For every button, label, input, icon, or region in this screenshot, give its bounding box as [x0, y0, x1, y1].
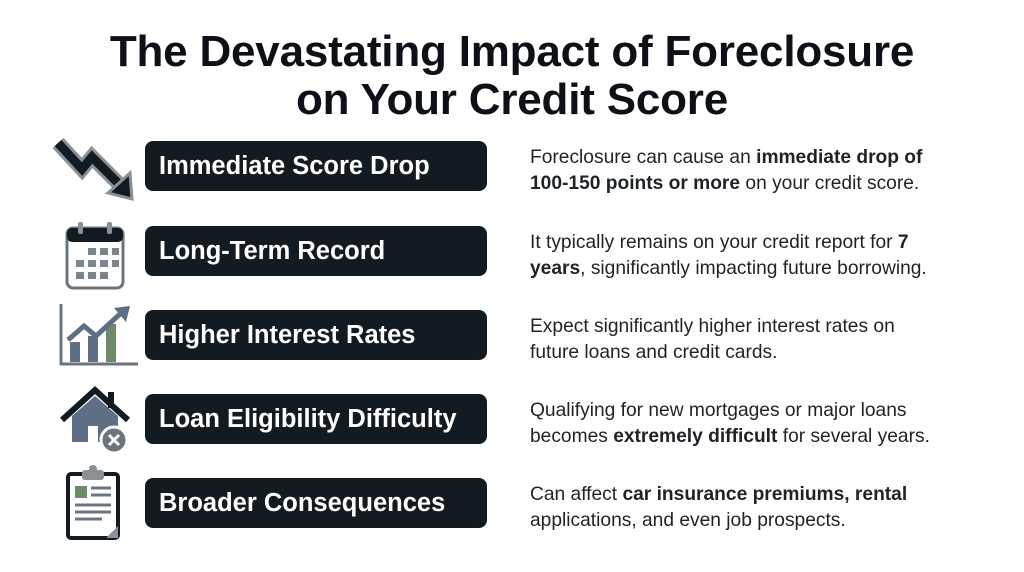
row 5 text: applications, and even job prospects. — [530, 510, 846, 531]
row 1 label — [145, 141, 487, 191]
row 4 label — [145, 394, 487, 444]
row 4 label: Loan Eligibility Difficulty — [159, 405, 457, 433]
row 4 text: becomes extremely difficult for several years. — [530, 426, 930, 447]
icon: down arrow — [52, 138, 134, 201]
icon: calendar — [66, 222, 124, 290]
row 5 label — [145, 478, 487, 528]
row 5 text: Can affect car insurance premiums, rental — [530, 484, 907, 505]
icon: house with x — [60, 386, 130, 452]
row 3 text: Expect significantly higher interest rates on — [530, 316, 895, 337]
icon: clipboard — [66, 465, 120, 540]
title: on Your Credit Score — [296, 75, 728, 124]
row 4 text: Qualifying for new mortgages or major loans — [530, 400, 906, 421]
title: The Devastating Impact of Foreclosure — [110, 27, 914, 76]
row 5 label: Broader Consequences — [159, 489, 445, 517]
row 3 label — [145, 310, 487, 360]
row 5 text — [530, 484, 907, 531]
row 4 text — [530, 400, 930, 447]
row 2 text: years, significantly impacting future borrowing. — [530, 258, 927, 279]
row 1 text: 100-150 points or more on your credit score. — [530, 173, 919, 194]
icon: rising chart — [60, 304, 138, 366]
row 2 text: It typically remains on your credit report for 7 — [530, 232, 909, 253]
row 3 text: future loans and credit cards. — [530, 342, 777, 363]
row 2 label: Long-Term Record — [159, 237, 385, 265]
row 1 text — [530, 147, 922, 194]
row 2 text — [530, 232, 927, 279]
row 1 label: Immediate Score Drop — [159, 152, 430, 180]
row 3 text — [530, 316, 895, 363]
row 3 label: Higher Interest Rates — [159, 321, 416, 349]
title — [110, 27, 914, 124]
row 1 text: Foreclosure can cause an immediate drop of — [530, 147, 922, 168]
row 2 label — [145, 226, 487, 276]
